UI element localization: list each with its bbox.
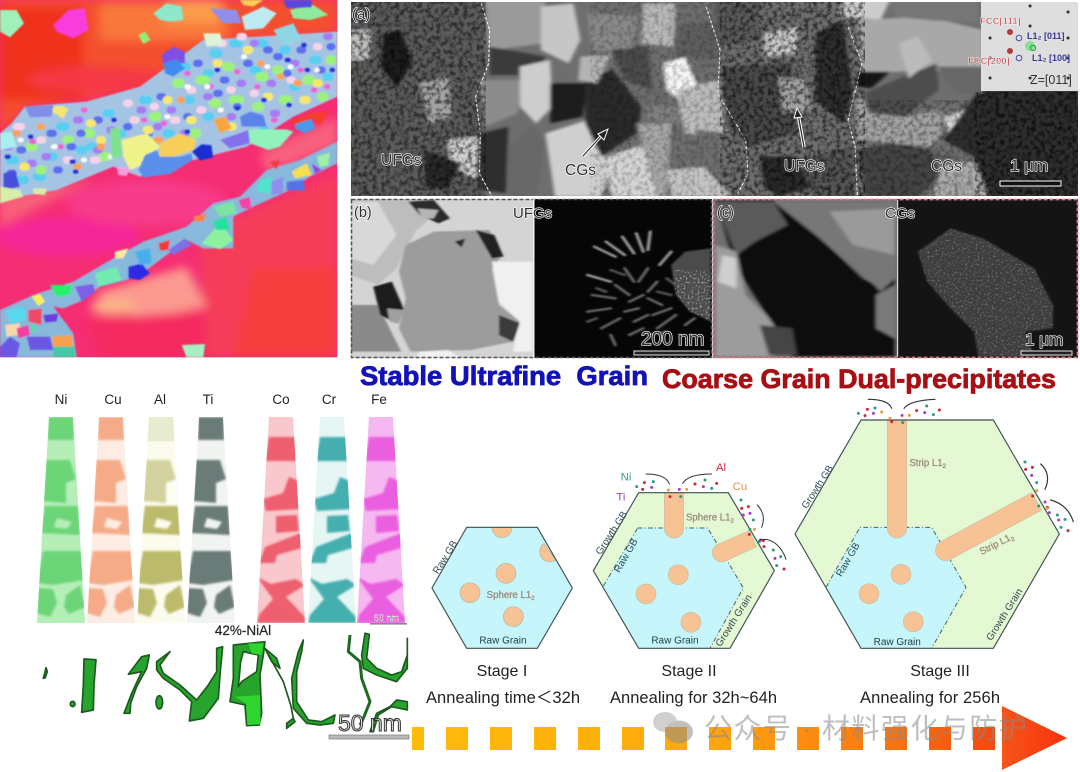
scale bar 1 μm bbox=[1000, 156, 1061, 186]
inset: diffraction pattern bbox=[968, 2, 1078, 91]
column: Al bbox=[137, 417, 185, 623]
heading: Coarse Grain Dual-precipitates: Coarse Grain Dual-precipitates bbox=[662, 364, 1056, 394]
label UFGs right: UFGs bbox=[784, 158, 825, 175]
text: account name: 公众号 · 材料强化与防护 bbox=[704, 713, 1028, 744]
inset: diffraction pattern: L1₂ [100] bbox=[1032, 53, 1070, 63]
column: Ni bbox=[37, 417, 85, 623]
labels: element names: Al bbox=[154, 392, 166, 407]
particles: strips and spheres bbox=[859, 420, 1042, 632]
solute atoms bbox=[858, 406, 1068, 531]
label Strip right: 2 bbox=[1010, 536, 1017, 543]
label Strip right: Strip L1 bbox=[978, 533, 1013, 558]
label Raw Grain: Raw Grain bbox=[874, 637, 921, 648]
heading: Stable Ultrafine Grain: Stable Ultrafine Grain bbox=[360, 361, 648, 391]
label UFGs left: UFGs bbox=[381, 152, 422, 169]
watermark bbox=[653, 712, 1028, 744]
label Strip top: 2 bbox=[943, 464, 947, 470]
scale bar 50 nm small: 50 nm bbox=[374, 613, 399, 623]
solute atoms bbox=[637, 480, 784, 569]
label Growth GB: Growth GB bbox=[800, 463, 836, 511]
divider between images bbox=[897, 200, 898, 357]
labels atoms bbox=[616, 462, 747, 504]
scale bar 200 nm: 200 nm bbox=[641, 329, 704, 350]
label Growth GB: Growth GB bbox=[594, 509, 630, 557]
top grains bbox=[53, 8, 88, 38]
label Strip top: Strip L1 bbox=[909, 458, 943, 469]
column: Ti bbox=[187, 417, 235, 623]
panel: TEM image (b) UFGs bbox=[350, 199, 712, 358]
particles: sphere L12 bbox=[460, 528, 556, 627]
labels: element names: Ni bbox=[55, 392, 67, 407]
grain boundaries dashed lines bbox=[476, 3, 862, 197]
labels: element names: Fe bbox=[371, 392, 387, 407]
label CGs right: CGs bbox=[931, 158, 962, 175]
labels: element names: Cu bbox=[104, 392, 122, 407]
scale bar 50 nm large: 50 nm bbox=[338, 710, 402, 736]
label Sphere L12: 2 bbox=[731, 518, 735, 524]
labels: element names bbox=[55, 392, 387, 407]
column: Fe bbox=[357, 417, 405, 623]
large grains bbox=[25, 105, 53, 117]
labels atoms: Cu bbox=[733, 481, 747, 493]
label CGs centre: CGs bbox=[565, 162, 596, 179]
3D isosurface: NiAl network bbox=[43, 633, 407, 732]
labels atoms: Ni bbox=[621, 471, 631, 483]
inset: diffraction pattern: Z=[011] bbox=[1030, 73, 1072, 87]
diagram: Stage II bbox=[593, 462, 786, 649]
labels: element names: Cr bbox=[322, 392, 337, 407]
labels atoms: Ti bbox=[616, 492, 625, 504]
label Raw GB: Raw GB bbox=[431, 539, 460, 576]
label Raw Grain: Raw Grain bbox=[651, 636, 699, 647]
arrow: dashed timeline bbox=[412, 706, 1067, 770]
caption: Stage I: Stage I bbox=[477, 663, 527, 680]
labels: element names: Ti bbox=[203, 392, 213, 407]
label Raw GB: Raw GB bbox=[834, 541, 863, 579]
icon: chat bubbles bbox=[653, 712, 693, 744]
divider between images bbox=[533, 199, 534, 358]
panel label (a): (a) bbox=[352, 6, 370, 23]
particles: rods and spheres bbox=[636, 493, 757, 632]
labels atoms: Al bbox=[716, 462, 726, 474]
label Raw GB: Raw GB bbox=[612, 537, 641, 575]
border dashed bbox=[352, 200, 712, 358]
curved flux arrows bbox=[868, 399, 1073, 522]
column: Cr bbox=[308, 417, 356, 623]
grain band 2 bbox=[0, 142, 337, 357]
label Growth Grain: Growth Grain bbox=[714, 593, 755, 649]
inset: diffraction pattern: FCC[200] bbox=[968, 56, 1010, 67]
scale bar 1 μm: 1 μm bbox=[1025, 330, 1063, 349]
diagram: Stage I bbox=[431, 527, 572, 648]
labels: element names: Co bbox=[272, 392, 290, 407]
arrow: CGs pointer bbox=[583, 129, 608, 156]
scale bar 1 μm bbox=[1021, 330, 1072, 355]
inset: diffraction pattern: L1₂ [011] bbox=[1027, 31, 1065, 41]
label Growth Grain: Growth Grain bbox=[985, 587, 1025, 643]
label Sphere L12: Sphere L1 bbox=[686, 512, 731, 523]
label Sphere L12: Sphere L1 bbox=[487, 590, 531, 601]
caption: Annealing time: Annealing time＜32h bbox=[426, 689, 580, 707]
label: 42%-NiAl: 42%-NiAl bbox=[215, 623, 271, 638]
arrow: UFGs pointer bbox=[794, 108, 804, 147]
column: Co bbox=[257, 417, 305, 623]
caption: Annealing 256h: Annealing for 256h bbox=[860, 689, 1000, 707]
inset: diffraction pattern: FCC[111] bbox=[980, 16, 1021, 27]
panel: TEM image (c) CGs bbox=[713, 199, 1078, 358]
scale bar 1 μm: 1 μm bbox=[1010, 156, 1048, 175]
label Sphere L12: 2 bbox=[531, 596, 535, 602]
caption: Stage II: Stage II bbox=[661, 663, 717, 680]
label UFGs: UFGs bbox=[513, 205, 552, 222]
element maps: atom probe columns bbox=[31, 392, 411, 625]
panel: EBSD orientation map bbox=[0, 0, 337, 357]
grain band 1 base bbox=[0, 32, 337, 200]
label CGs: CGs bbox=[885, 205, 915, 222]
column: Cu bbox=[87, 417, 135, 623]
label (b): (b) bbox=[354, 205, 372, 221]
label Raw Grain: Raw Grain bbox=[479, 636, 527, 647]
border dashed bbox=[714, 200, 1078, 358]
panel: TEM image (a) bbox=[350, 0, 1080, 197]
scale bar 200 nm bbox=[634, 329, 709, 355]
caption: Stage III: Stage III bbox=[910, 663, 970, 680]
diagram: Stage III bbox=[795, 399, 1073, 648]
scale bar 50 nm small bbox=[370, 613, 407, 625]
caption: Annealing 32-64h: Annealing for 32h~64h bbox=[610, 689, 777, 707]
dark-field fibrous grain bbox=[587, 232, 694, 345]
curved flux arrows bbox=[646, 474, 786, 559]
label (c): (c) bbox=[717, 205, 734, 221]
